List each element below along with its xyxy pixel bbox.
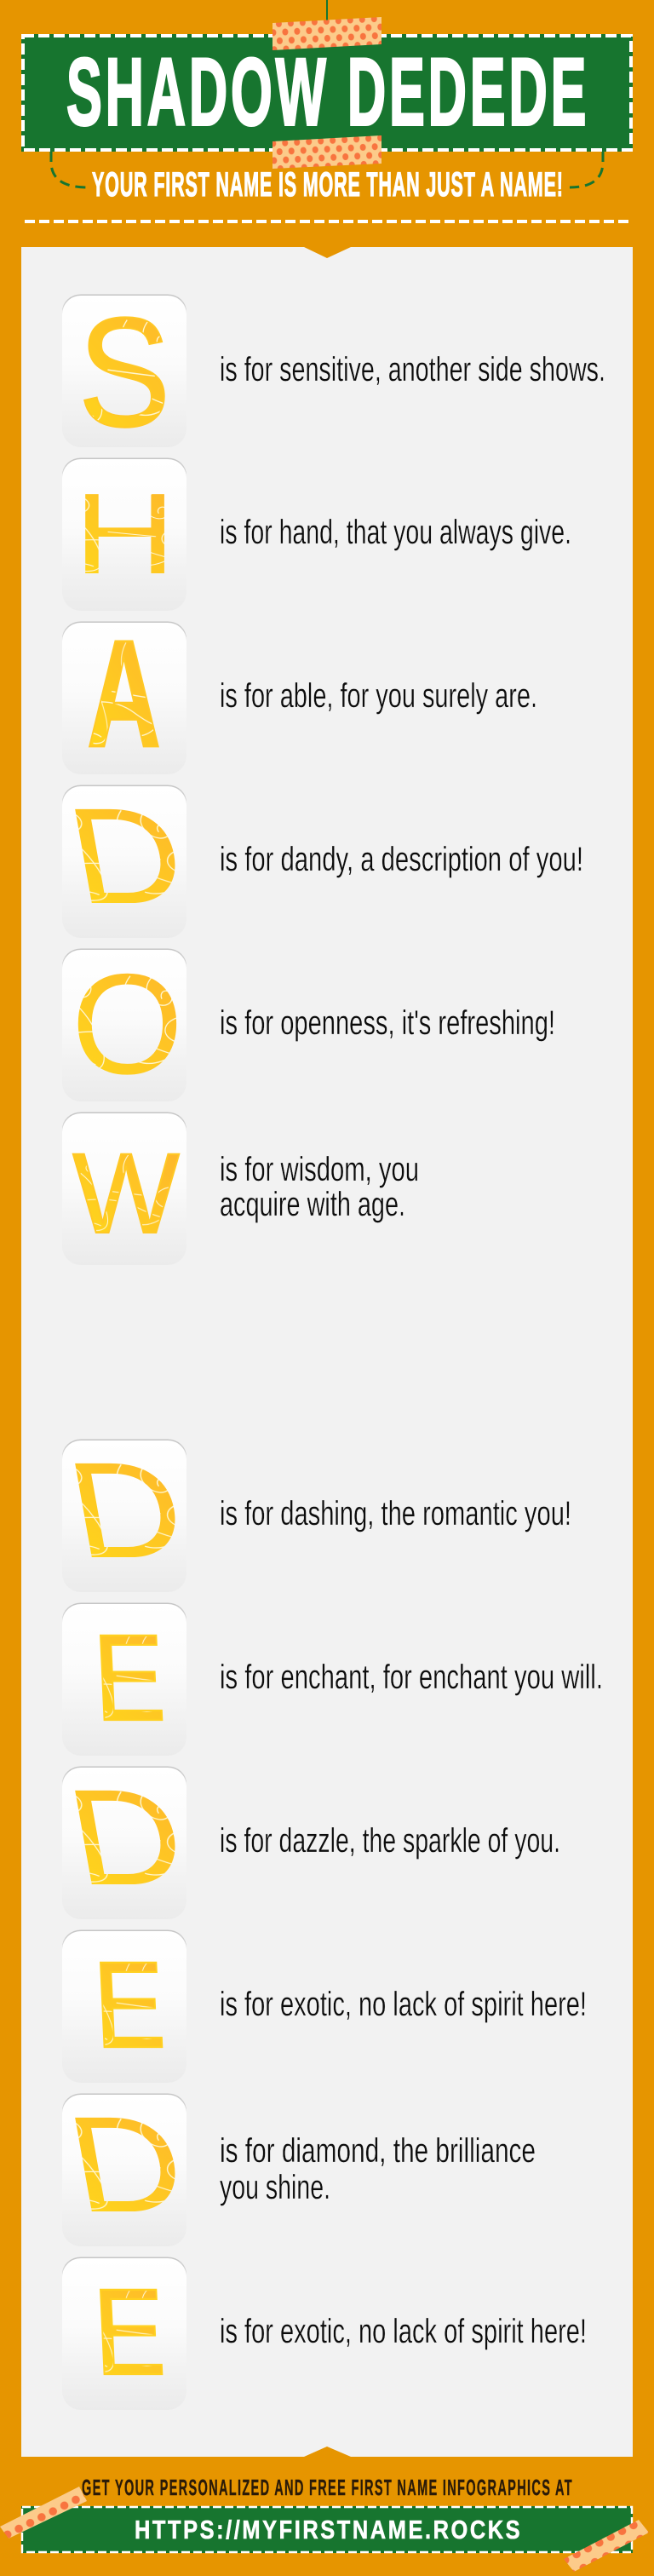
hanging string xyxy=(326,0,328,20)
subtitle: YOUR FIRST NAME IS MORE THAN JUST A NAME! xyxy=(92,165,563,204)
row: O xyxy=(62,943,555,1104)
letter D: D xyxy=(57,1435,195,1587)
tile xyxy=(62,2094,186,2246)
tape: footer left xyxy=(0,2487,87,2539)
row: E xyxy=(62,1603,603,1756)
tile xyxy=(62,458,186,611)
text: is for diamond, the brilliance xyxy=(220,2132,536,2170)
row: H xyxy=(62,458,571,611)
row: S xyxy=(62,285,605,459)
row: D xyxy=(57,2089,536,2246)
url: HTTPS://MYFIRSTNAME.ROCKS xyxy=(135,2516,520,2545)
row: D xyxy=(57,1435,571,1592)
footer lead text: GET YOUR PERSONALIZED AND FREE FIRST NAME INFOGRAPHICS AT xyxy=(82,2476,572,2500)
text: acquire with age. xyxy=(220,1186,405,1223)
letter D: D xyxy=(57,1762,195,1914)
letter O: O xyxy=(72,943,183,1104)
row: W xyxy=(62,1113,419,1265)
tile xyxy=(62,785,186,938)
letter D: D xyxy=(57,2089,195,2241)
text: is for able, for you surely are. xyxy=(220,677,537,715)
row: A xyxy=(62,609,537,779)
tile xyxy=(62,295,186,447)
title: SHADOW DEDEDE xyxy=(66,40,586,146)
letter A: A xyxy=(87,609,161,779)
connector: left xyxy=(51,152,88,187)
dashed divider xyxy=(25,220,629,223)
text: you shine. xyxy=(220,2169,330,2206)
tape: bottom of banner xyxy=(272,135,382,169)
letter W: W xyxy=(72,1130,180,1257)
letter D: D xyxy=(57,780,195,933)
tile xyxy=(62,2257,186,2410)
tile xyxy=(62,1930,186,2083)
letter H: H xyxy=(74,470,175,598)
letter E: E xyxy=(90,2263,168,2401)
row: D xyxy=(57,1762,560,1919)
letter E: E xyxy=(90,1609,168,1746)
row: D xyxy=(57,780,583,938)
connector: right xyxy=(570,152,603,187)
text xyxy=(220,1151,419,1223)
footer banner xyxy=(21,2506,633,2553)
tile xyxy=(62,1440,186,1592)
text: is for wisdom, you xyxy=(220,1151,419,1188)
title banner xyxy=(21,34,633,152)
tile xyxy=(62,622,186,774)
row: E xyxy=(62,1930,587,2083)
text xyxy=(220,2132,536,2206)
letter E: E xyxy=(90,1936,168,2073)
tape: footer right xyxy=(564,2520,649,2572)
tile xyxy=(62,1767,186,1919)
tile xyxy=(62,1113,186,1265)
tile xyxy=(62,1603,186,1756)
letter S: S xyxy=(78,285,170,459)
tile xyxy=(62,949,186,1101)
tape: top xyxy=(272,17,382,50)
row: E xyxy=(62,2257,587,2410)
